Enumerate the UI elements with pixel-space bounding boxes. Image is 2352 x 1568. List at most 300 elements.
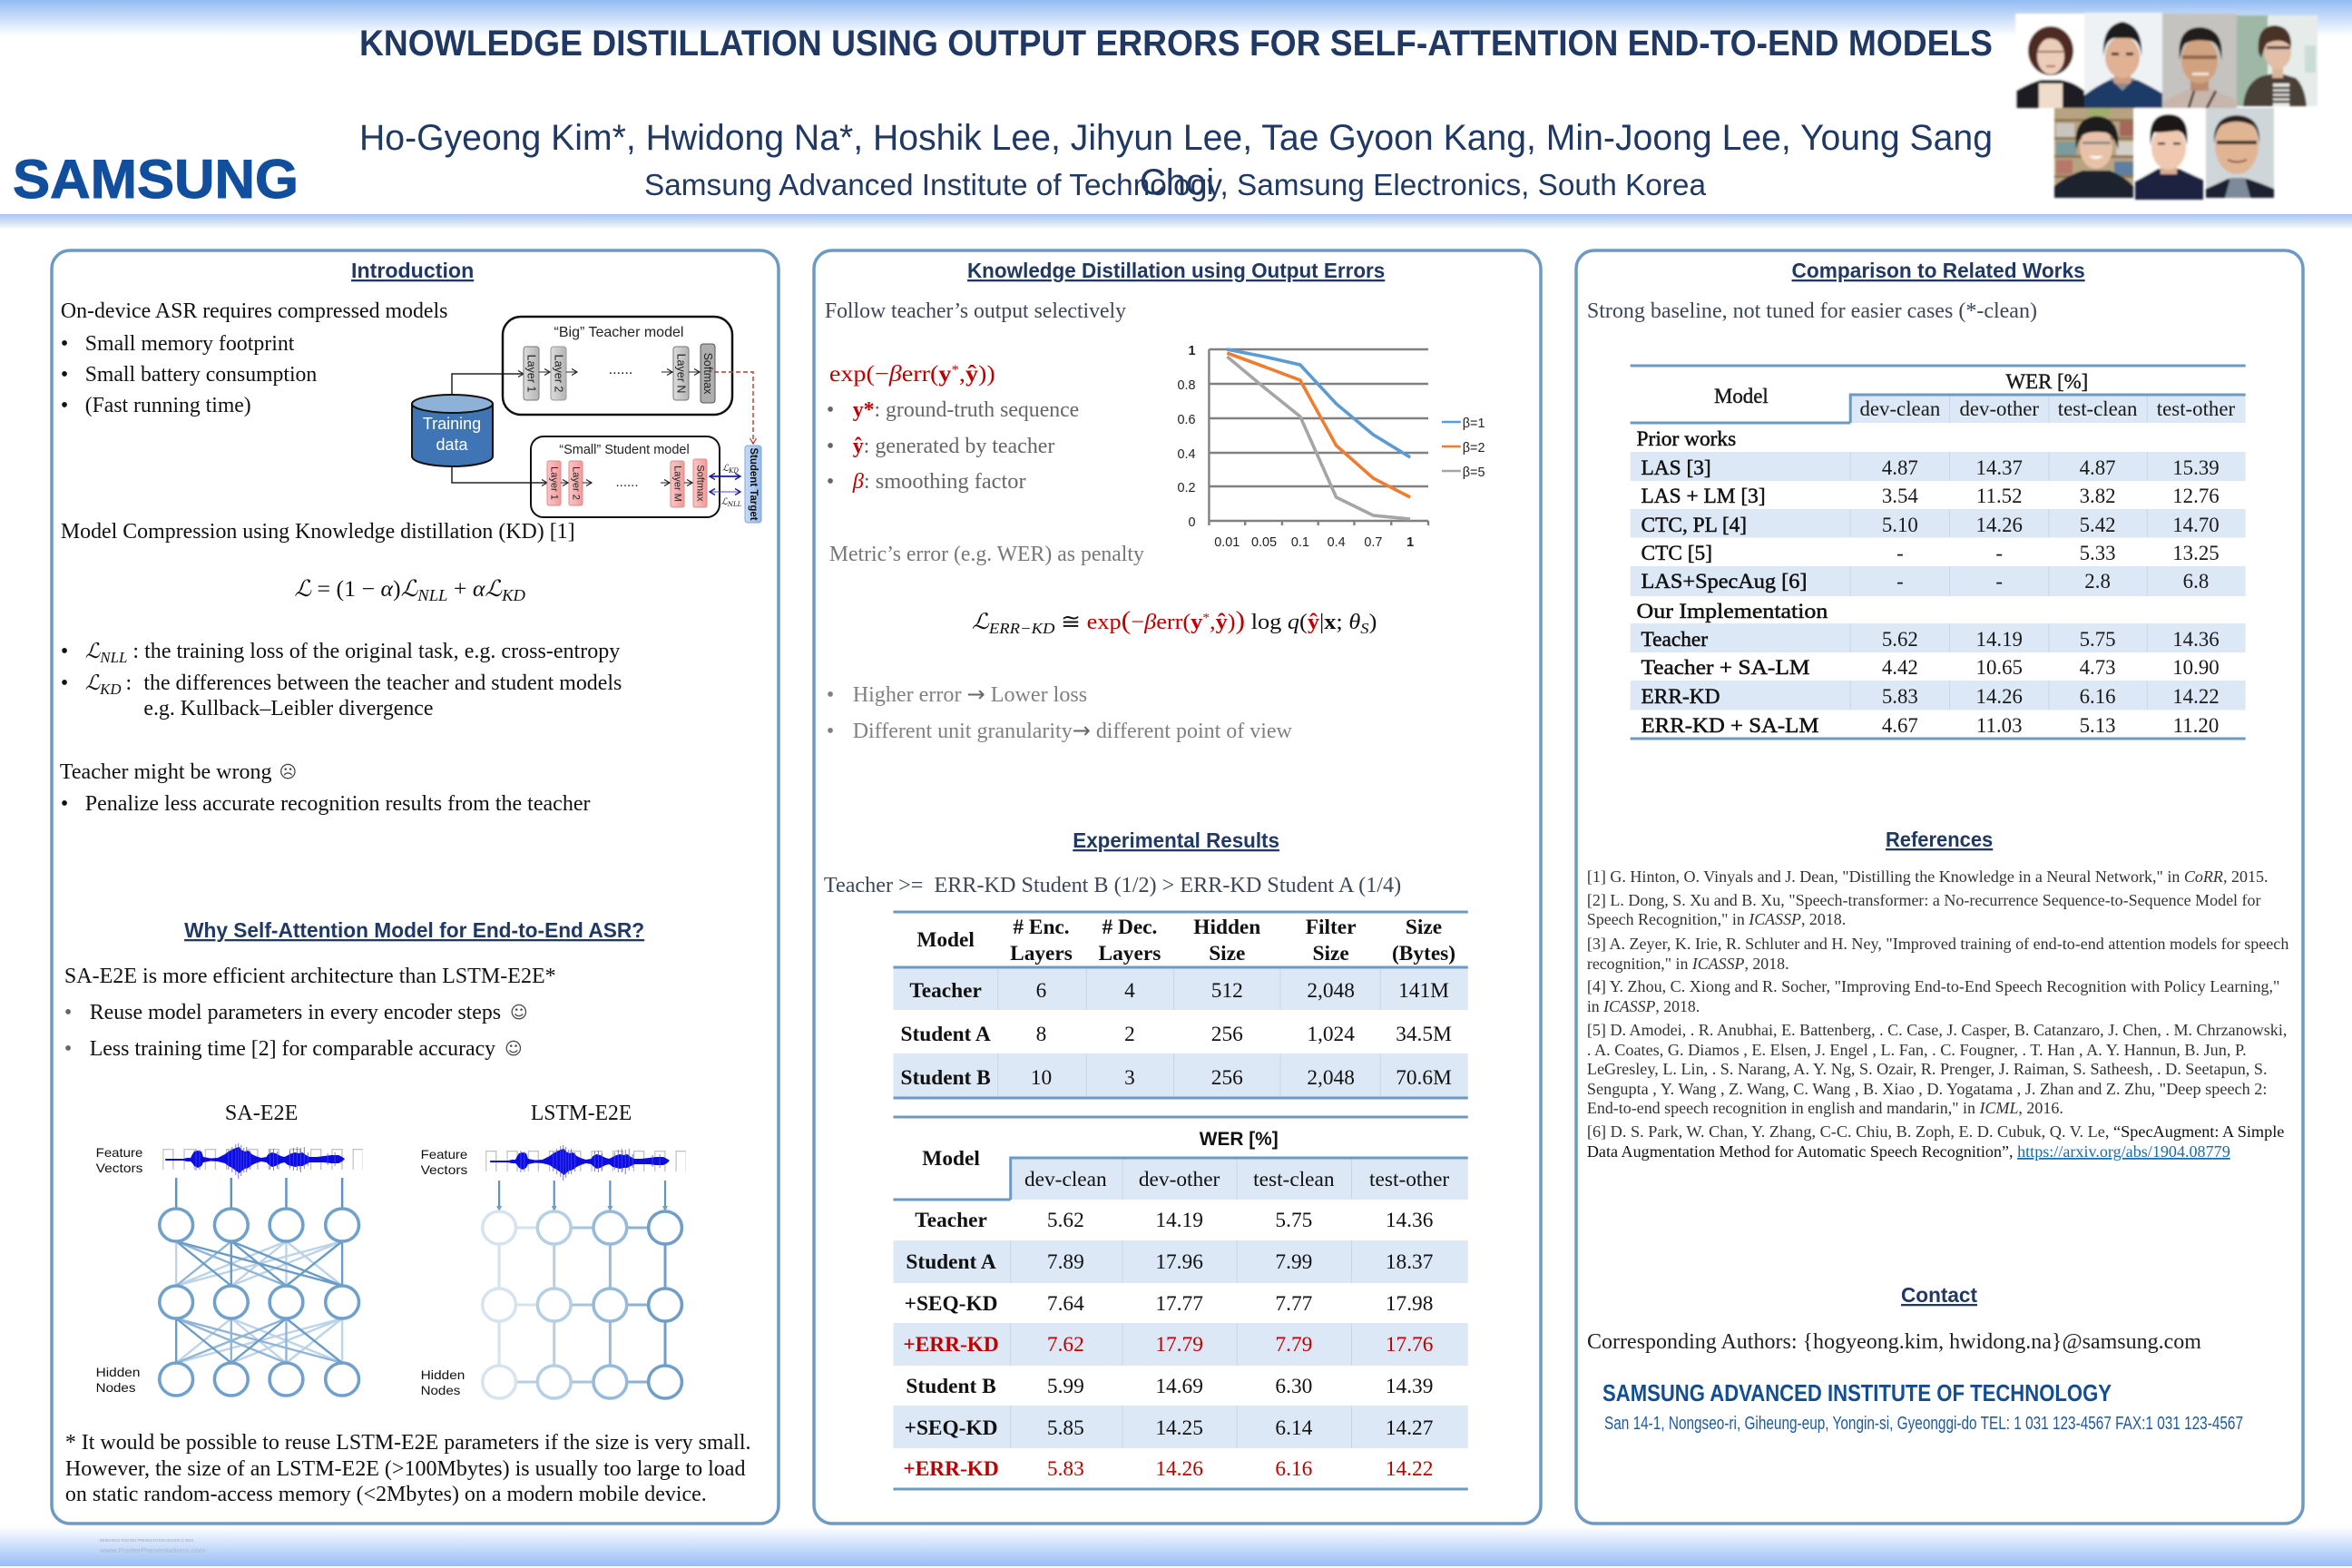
table: wer results: 14.36 <box>1386 1209 1434 1232</box>
table: related works: Teacher + SA-LM <box>1642 656 1810 680</box>
text block: references <box>1587 867 2289 1161</box>
table: model sizes: Student B <box>900 1066 991 1090</box>
table: related works: 14.26 <box>1976 685 2023 708</box>
table: wer results: 14.26 <box>1155 1457 1203 1481</box>
chart: smoothing curves: 0.4 <box>1177 447 1196 462</box>
diagram: sa-e2e network: SA-E2E <box>225 1102 298 1125</box>
table: related works: 5.42 <box>2080 514 2116 536</box>
dashed target arrow <box>714 372 753 444</box>
table: wer results: 7.79 <box>1275 1333 1312 1357</box>
samsung logo: SAMSUNG <box>13 149 299 210</box>
photo: author 6 <box>2135 108 2203 200</box>
table: model sizes: 256 <box>1211 1023 1243 1046</box>
chart: smoothing curves: 0.7 <box>1364 535 1382 550</box>
table: wer results: 6.14 <box>1275 1416 1313 1440</box>
text block: effects: Different unit granularity→ different point of view <box>853 718 1293 743</box>
table: related works: 13.25 <box>2172 542 2220 564</box>
panel: middle column <box>814 250 1541 1524</box>
table: related works: 6.8 <box>2183 570 2209 593</box>
table: related works: test-clean <box>2058 397 2138 420</box>
table: wer results: 14.25 <box>1155 1416 1203 1440</box>
text block: sa-e2e efficiency: SA-E2E is more efficient architecture than LSTM-E2E* <box>64 965 556 988</box>
table: related works: 11.52 <box>1976 485 2023 507</box>
text block: effects: • <box>827 720 834 743</box>
heading: contact: Contact <box>1901 1283 1977 1307</box>
table: model sizes: Size <box>1209 942 1245 965</box>
panel: right column <box>1576 250 2303 1524</box>
diagram: sa-e2e network: Feature <box>96 1145 143 1160</box>
table: related works: dev-other <box>1959 397 2039 420</box>
loss arrows: KD <box>728 467 739 475</box>
table: model sizes: 2,048 <box>1307 979 1355 1003</box>
heading: introduction: Introduction <box>351 259 474 282</box>
text block: references: [6] D. S. Park, W. Chan, Y. Zhang, C-C. Chiu, B. Zoph, E. D. Cubuk, Q. V. Le, “SpecAugment: A Simple <box>1587 1122 2285 1141</box>
photo: author 7 <box>2206 108 2274 198</box>
table: model sizes: Size <box>1313 942 1349 965</box>
text block: penalty definition: β: smoothing factor <box>852 470 1026 494</box>
table: related works: 5.33 <box>2080 542 2116 564</box>
chart: smoothing curves: 1 <box>1188 344 1196 358</box>
formula: total loss: NLL <box>416 586 447 604</box>
text block: references: . A. Coates, G. Diamos , E. Elsen, J. Engel , L. Fan, . C. Fougner, . T. Han , A. Y. Hannun, B. Jun, P. <box>1587 1041 2247 1059</box>
text block: on-device asr: Small battery consumption <box>85 363 317 387</box>
table: related works: ERR-KD + SA-LM <box>1642 714 1819 738</box>
table: related works: LAS+SpecAug [6] <box>1642 570 1807 593</box>
table: wer results: 17.76 <box>1386 1333 1434 1357</box>
table: related works: - <box>1896 570 1904 593</box>
table: model sizes: Layers <box>1010 942 1073 965</box>
table: related works: 10.65 <box>1976 656 2023 679</box>
table: wer results: 6.30 <box>1275 1375 1312 1398</box>
table: related works: 5.75 <box>2080 628 2116 651</box>
formula: err-kd loss: ℒ <box>972 609 990 634</box>
text block: effects: • <box>827 683 834 707</box>
text block: penalty definition: • <box>827 398 834 422</box>
table: wer results: 17.96 <box>1155 1250 1203 1274</box>
teacher model box: Softmax <box>701 353 714 395</box>
table: model sizes: Hidden <box>1193 916 1260 939</box>
text block: penalty definition: exp(− βerr(y <box>829 362 950 387</box>
text block: penalty definition: y*: ground-truth sequence <box>853 398 1079 422</box>
table: wer results: 7.62 <box>1047 1333 1084 1357</box>
text: ranking: Teacher >= ERR-KD Student B (1/2) > ERR-KD Student A (1/4) <box>824 874 1401 897</box>
diagram: lstm-e2e network: Feature <box>421 1147 468 1161</box>
teacher model box: Layer 2 <box>552 355 564 392</box>
panel: left column <box>52 250 779 1524</box>
table: model sizes: 2,048 <box>1307 1066 1355 1090</box>
teacher model box: Layer N <box>675 354 688 393</box>
table: wer results: +SEQ-KD <box>905 1416 998 1440</box>
teacher model box <box>503 317 732 415</box>
table: model sizes: 2 <box>1124 1023 1135 1046</box>
formula: err-kd loss: * <box>1202 612 1210 625</box>
text block: teacher might be wrong: ☹ <box>279 762 297 782</box>
text block: sa-e2e efficiency <box>64 965 556 1061</box>
authors <box>359 118 1993 202</box>
table: related works: WER [%] <box>2006 370 2088 393</box>
table: wer results: 5.99 <box>1047 1375 1084 1398</box>
teacher model box: “Big” Teacher model <box>554 325 683 340</box>
photo: author 5 <box>2054 108 2133 198</box>
table: wer results: 5.75 <box>1275 1209 1312 1232</box>
text block: loss definitions: the differences between the teacher and student models <box>143 671 622 695</box>
table: wer results: dev-other <box>1139 1168 1220 1191</box>
photo: author 2 <box>2084 13 2162 108</box>
diagram: lstm-e2e network: Nodes <box>421 1383 460 1397</box>
table: related works: 15.39 <box>2172 456 2220 479</box>
table: wer results: Teacher <box>915 1209 987 1232</box>
text block: loss definitions: KD <box>99 681 122 698</box>
text block: loss definitions <box>61 640 622 720</box>
table: related works: CTC [5] <box>1642 542 1712 565</box>
affiliation: Samsung Advanced Institute of Technology, Samsung Electronics, South Korea <box>644 168 1707 201</box>
formula: total loss: + <box>447 577 473 602</box>
table: wer results: WER [%] <box>1200 1129 1279 1150</box>
formula: total loss: KD <box>501 586 525 604</box>
text block: references: recognition," in ICASSP, 2018. <box>1587 955 1789 973</box>
text block: references: [5] D. Amodei, . R. Anubhai, E. Battenberg, . C. Case, J. Casper, B. Catanzaro, J. Chen, . M. Chrzanowski, <box>1587 1021 2287 1039</box>
text block: on-device asr: • <box>61 332 68 356</box>
text block: loss definitions: ℒ <box>85 640 101 663</box>
table: model sizes: 141M <box>1398 979 1449 1003</box>
text block: loss definitions: : the training loss of the original task, e.g. cross-entropy <box>132 640 620 663</box>
table: related works: 5.10 <box>1882 514 1918 536</box>
text block: teacher might be wrong: • <box>61 792 68 816</box>
table: model sizes: 4 <box>1124 979 1135 1003</box>
table: related works: 3.54 <box>1882 485 1918 507</box>
table: model sizes: Teacher <box>909 979 982 1003</box>
table: related works: 5.62 <box>1882 628 1918 651</box>
table: wer results: +SEQ-KD <box>905 1292 998 1316</box>
formula: err-kd loss: ) <box>1369 611 1377 634</box>
table: model sizes: # Dec. <box>1102 916 1157 939</box>
table: model sizes: 1,024 <box>1307 1023 1355 1046</box>
text block: loss definitions: NLL <box>99 649 127 666</box>
table: related works: 4.42 <box>1882 656 1918 679</box>
text block: references: Sengupta , Y. Wang , Z. Wang, C. Wang , B. Xiao , D. Yogatama , J. Zhan and Z. Zhu, "Deep speech 2: <box>1587 1080 2268 1098</box>
text block: sa-e2e efficiency: ☺ <box>505 1039 523 1059</box>
text block: references: Speech Recognition," in ICASSP, 2018. <box>1587 910 1846 928</box>
table: related works: 14.22 <box>2172 685 2220 708</box>
table: related works: 14.36 <box>2172 628 2220 651</box>
text block: penalty definition: • <box>827 470 834 494</box>
text: corresponding authors: Corresponding Authors: {hogyeong.kim, hwidong.na}@samsung.com <box>1587 1330 2201 1354</box>
student model box: ...... <box>615 475 639 490</box>
text block: references: [4] Y. Zhou, C. Xiong and R. Socher, "Improving End-to-End Speech Recognition with Policy Learning," <box>1587 977 2279 995</box>
database: training data: data <box>436 436 468 454</box>
heading: comparison: Comparison to Related Works <box>1792 259 2085 282</box>
student target <box>745 446 761 523</box>
text block: on-device asr: On-device ASR requires compressed models <box>61 299 447 323</box>
table: model sizes: 10 <box>1031 1066 1052 1090</box>
table: related works: 4.67 <box>1882 714 1918 737</box>
table: model sizes: 34.5M <box>1396 1023 1452 1046</box>
formula: err-kd loss: S <box>1360 620 1369 637</box>
chart: smoothing curves: 1 <box>1406 535 1414 550</box>
table: wer results: 7.89 <box>1047 1250 1084 1274</box>
text: strong baseline: Strong baseline, not tuned for easier cases (*-clean) <box>1587 299 2037 323</box>
footer credit: www.PosterPresentations.com <box>99 1546 206 1554</box>
table: wer results: 14.27 <box>1386 1416 1434 1440</box>
text block: on-device asr: Small memory footprint <box>85 332 295 356</box>
student model box: Layer 1 <box>548 466 559 500</box>
table: related works: Prior works <box>1637 427 1736 451</box>
formula: err-kd loss: ŷ)) log q(ŷ|x; θ <box>1216 606 1359 635</box>
heading: references: References <box>1886 828 1993 851</box>
table: related works: dev-clean <box>1859 397 1941 420</box>
table: model sizes: # Enc. <box>1013 916 1070 939</box>
table: related works: LAS + LM [3] <box>1642 485 1766 508</box>
authors: Choi <box>1140 162 1214 202</box>
text block: footnote: on static random-access memory (<2Mbytes) on a modern mobile device. <box>65 1483 707 1506</box>
chart: smoothing curves: 0.6 <box>1177 413 1196 427</box>
text block: on-device asr: • <box>61 363 68 387</box>
table: model sizes: Model <box>916 928 975 952</box>
formula: total loss: αℒ <box>473 575 501 602</box>
top gradient band <box>0 0 2352 36</box>
database: training data: Training <box>423 415 481 433</box>
text block: footnote <box>65 1431 750 1506</box>
text: metric error: Metric’s error (e.g. WER) as penalty <box>829 543 1144 566</box>
table: related works: 14.26 <box>1976 514 2023 536</box>
diagram: sa-e2e network: Vectors <box>96 1161 142 1175</box>
table: related works: CTC, PL [4] <box>1642 514 1747 537</box>
text block: loss definitions: • <box>61 671 68 695</box>
loss arrows: ℒ <box>721 497 728 507</box>
loss arrows: ℒ <box>722 464 729 474</box>
text block: loss definitions: e.g. Kullback–Leibler divergence <box>143 697 434 720</box>
chart: smoothing curves: 0 <box>1188 515 1196 530</box>
table: model sizes: 3 <box>1124 1066 1135 1090</box>
text block: sa-e2e efficiency: • <box>64 1001 72 1024</box>
table: model sizes: 70.6M <box>1396 1066 1452 1090</box>
chart: smoothing curves: 0.05 <box>1251 535 1277 550</box>
text block: on-device asr: (Fast running time) <box>85 394 251 417</box>
text block: references: [3] A. Zeyer, K. Irie, R. Schluter and H. Ney, "Improved training of end-to-end attention models for speech <box>1587 935 2289 953</box>
table: related works: 4.87 <box>2080 456 2116 479</box>
table: related works: 5.83 <box>1882 685 1918 708</box>
block: institute address: SAMSUNG ADVANCED INSTITUTE OF TECHNOLOGY <box>1602 1379 2112 1406</box>
table: related works: - <box>1995 542 2003 564</box>
author photos <box>2015 13 2318 200</box>
diagram: lstm-e2e network <box>421 1102 686 1398</box>
table: model sizes: Filter <box>1306 916 1357 939</box>
table: model sizes: 6 <box>1036 979 1047 1003</box>
text block: penalty definition: ŷ)) <box>965 362 994 387</box>
title: KNOWLEDGE DISTILLATION USING OUTPUT ERRORS FOR SELF-ATTENTION END-TO-END MODELS <box>359 24 1993 64</box>
text block: loss definitions: : <box>125 671 132 695</box>
table: related works: 3.82 <box>2080 485 2116 507</box>
table: wer results: test-clean <box>1253 1168 1335 1191</box>
table: wer results: 6.16 <box>1275 1457 1313 1481</box>
table: related works: 14.70 <box>2172 514 2220 536</box>
student model box: Layer M <box>671 466 682 502</box>
text block: penalty definition: * <box>951 363 959 377</box>
text block: references: LeGresley, L. Lin, . S. Narang, A. Y. Ng, S. Ozair, R. Prenger, J. Raiman, S. Satheesh, . D. Seetapun, S. <box>1587 1060 2268 1078</box>
table: wer results: 14.69 <box>1155 1375 1203 1398</box>
table: related works: 12.76 <box>2172 485 2220 507</box>
footer credit <box>99 1537 206 1554</box>
table: model sizes: (Bytes) <box>1392 942 1455 965</box>
text block: on-device asr <box>61 299 447 417</box>
chart: smoothing curves: 0.4 <box>1328 535 1346 550</box>
table: model sizes: 256 <box>1211 1066 1243 1090</box>
table: related works: Model <box>1714 385 1769 407</box>
table: model sizes <box>893 912 1468 1098</box>
table: related works: ERR-KD <box>1642 685 1720 709</box>
table: related works: Teacher <box>1642 628 1708 652</box>
diagram: sa-e2e network: Hidden <box>96 1365 140 1379</box>
chart legend: β=5 <box>1463 466 1485 480</box>
text block: teacher might be wrong: Penalize less accurate recognition results from the teacher <box>85 792 591 816</box>
text block: on-device asr: • <box>61 394 68 417</box>
bottom gradient band <box>0 1526 2352 1566</box>
text block: references: Data Augmentation Method for Automatic Speech Recognition”, https://arxiv.org/abs/1904.08779 <box>1587 1142 2230 1161</box>
student model box: Softmax <box>695 465 706 502</box>
table: related works: Our Implementation <box>1637 600 1828 623</box>
table: related works: 6.16 <box>2080 685 2116 708</box>
chart: smoothing curves: 0.1 <box>1291 535 1309 550</box>
student model box <box>531 436 720 517</box>
table: wer results: 17.77 <box>1155 1292 1203 1316</box>
table: wer results: 5.62 <box>1047 1209 1084 1232</box>
table: wer results: 14.19 <box>1155 1209 1203 1232</box>
table: wer results: Student A <box>906 1250 996 1274</box>
text block: effects: Higher error → Lower loss <box>853 681 1087 707</box>
table: related works: - <box>1995 570 2003 593</box>
table: model sizes: 8 <box>1036 1023 1046 1046</box>
text block: effects <box>827 681 1293 743</box>
photo: author 3 <box>2162 14 2237 108</box>
heading: knowledge distillation: Knowledge Distillation using Output Errors <box>967 259 1385 282</box>
authors: Ho-Gyeong Kim*, Hwidong Na*, Hoshik Lee, Jihyun Lee, Tae Gyoon Kang, Min-Joong Lee, Young Sang <box>359 118 1993 158</box>
table: related works: LAS [3] <box>1642 456 1711 480</box>
chart legend <box>1442 416 1485 480</box>
chart: smoothing curves <box>1177 344 1485 550</box>
chart: smoothing curves: 0.2 <box>1177 481 1196 495</box>
diagram: lstm-e2e network: Vectors <box>421 1162 467 1177</box>
table: wer results: 17.79 <box>1155 1333 1203 1357</box>
text block: footnote: * It would be possible to reuse LSTM-E2E parameters if the size is very small. <box>65 1431 750 1455</box>
table: related works: 11.03 <box>1976 714 2023 737</box>
student model box: Layer 2 <box>570 466 581 500</box>
table: wer results: Model <box>922 1147 980 1171</box>
loss arrows: NLL <box>727 501 742 508</box>
table: model sizes: 512 <box>1211 979 1243 1003</box>
table: wer results: +ERR-KD <box>903 1333 999 1357</box>
teacher model box: Layer 1 <box>524 355 537 392</box>
diagram: sa-e2e network <box>96 1102 363 1396</box>
footer credit: RESEARCH POSTER PRESENTATION DESIGN © 2015 <box>100 1537 193 1543</box>
diagram: teacher student model <box>412 317 761 523</box>
block: institute address <box>1602 1379 2243 1434</box>
table: related works: 14.19 <box>1976 628 2023 651</box>
table: related works: 10.90 <box>2172 656 2220 679</box>
table: model sizes: Student A <box>900 1023 991 1046</box>
chart: smoothing curves: 0.8 <box>1177 378 1196 393</box>
loss arrows <box>710 464 742 508</box>
table: wer results: 14.39 <box>1386 1375 1433 1398</box>
table: related works: 11.20 <box>2173 714 2219 737</box>
table: wer results: 17.98 <box>1386 1292 1433 1316</box>
text block: sa-e2e efficiency: Reuse model parameters in every encoder steps <box>90 1001 501 1024</box>
text block: references: End-to-end speech recognition in english and mandarin," in ICML, 2016. <box>1587 1099 2063 1117</box>
table: model sizes: Size <box>1406 916 1442 939</box>
table: wer results: 5.85 <box>1047 1416 1084 1440</box>
formula: err-kd loss: ≅ <box>1054 611 1087 634</box>
table: wer results: dev-clean <box>1024 1168 1107 1191</box>
table: wer results: 18.37 <box>1386 1250 1434 1274</box>
text block: loss definitions: ℒ <box>85 671 101 695</box>
table: model sizes: Layers <box>1099 942 1161 965</box>
table: related works: 4.87 <box>1882 456 1918 479</box>
table: related works: 4.73 <box>2080 656 2116 679</box>
formula: err-kd loss: exp(−βerr(y <box>1087 606 1201 635</box>
text block: teacher might be wrong <box>60 760 591 816</box>
student target: Student Target <box>748 447 759 521</box>
photo: author 4 <box>2237 15 2318 106</box>
chart legend: β=2 <box>1463 441 1485 456</box>
table: related works <box>1631 366 2246 739</box>
text block: references: in ICASSP, 2018. <box>1587 997 1700 1015</box>
table: wer results: 5.83 <box>1047 1457 1084 1481</box>
teacher model box: ...... <box>609 362 632 377</box>
student model box: “Small” Student model <box>559 443 690 457</box>
text block: penalty definition: • <box>827 435 834 458</box>
table: related works: - <box>1896 542 1904 564</box>
formula: err-kd loss: ERR−KD <box>988 620 1054 637</box>
table: related works: 5.13 <box>2080 714 2116 737</box>
text block: footnote: However, the size of an LSTM-E2E (>100Mbytes) is usually too large to load <box>65 1457 746 1481</box>
table: wer results <box>893 1117 1468 1489</box>
text block: penalty definition: , <box>959 362 965 387</box>
diagram: sa-e2e network: Nodes <box>96 1380 135 1395</box>
chart: smoothing curves: 0.01 <box>1214 535 1240 550</box>
table: wer results: 7.64 <box>1047 1292 1084 1316</box>
table: wer results: Student B <box>906 1375 996 1398</box>
diagram: lstm-e2e network: Hidden <box>421 1367 465 1382</box>
table: wer results: 7.99 <box>1275 1250 1312 1274</box>
chart legend: β=1 <box>1463 416 1485 431</box>
text block: sa-e2e efficiency: ☺ <box>510 1003 528 1023</box>
table: wer results: 14.22 <box>1386 1457 1433 1481</box>
text block: sa-e2e efficiency: Less training time [2] for comparable accuracy <box>90 1037 495 1061</box>
table: wer results: test-other <box>1369 1168 1449 1191</box>
header divider band <box>0 214 2352 228</box>
database: training data <box>412 395 493 466</box>
table: related works: 2.8 <box>2084 570 2111 593</box>
diagram: lstm-e2e network: LSTM-E2E <box>531 1102 632 1125</box>
heading: why self-attention: Why Self-Attention Model for End-to-End ASR? <box>184 918 644 942</box>
text block: penalty definition: ŷ: generated by teacher <box>853 435 1054 458</box>
text: model compression: Model Compression using Knowledge distillation (KD) [1] <box>61 520 575 544</box>
text block: penalty definition <box>827 362 1079 494</box>
photo: author 1 <box>2015 14 2084 108</box>
formula: total loss: ℒ = (1 − α)ℒ <box>294 575 417 602</box>
table: wer results: +ERR-KD <box>903 1457 999 1481</box>
text block: sa-e2e efficiency: • <box>64 1037 72 1061</box>
text block: references: [2] L. Dong, S. Xu and B. Xu, "Speech-transformer: a No-recurrence Sequence-to-Sequence Model for <box>1587 891 2261 909</box>
formula: err-kd loss: , <box>1210 611 1216 634</box>
table: related works: test-other <box>2157 397 2235 420</box>
text block: teacher might be wrong: Teacher might be wrong <box>60 760 272 784</box>
heading: experimental results: Experimental Results <box>1073 828 1279 852</box>
text block: loss definitions: • <box>61 640 68 663</box>
table: related works: 14.37 <box>1976 456 2023 479</box>
text block: references: [1] G. Hinton, O. Vinyals and J. Dean, "Distilling the Knowledge in a Neural Network," in CoRR, 2015. <box>1587 867 2269 886</box>
table: wer results: 7.77 <box>1275 1292 1313 1316</box>
text: follow teacher: Follow teacher’s output selectively <box>825 299 1126 323</box>
